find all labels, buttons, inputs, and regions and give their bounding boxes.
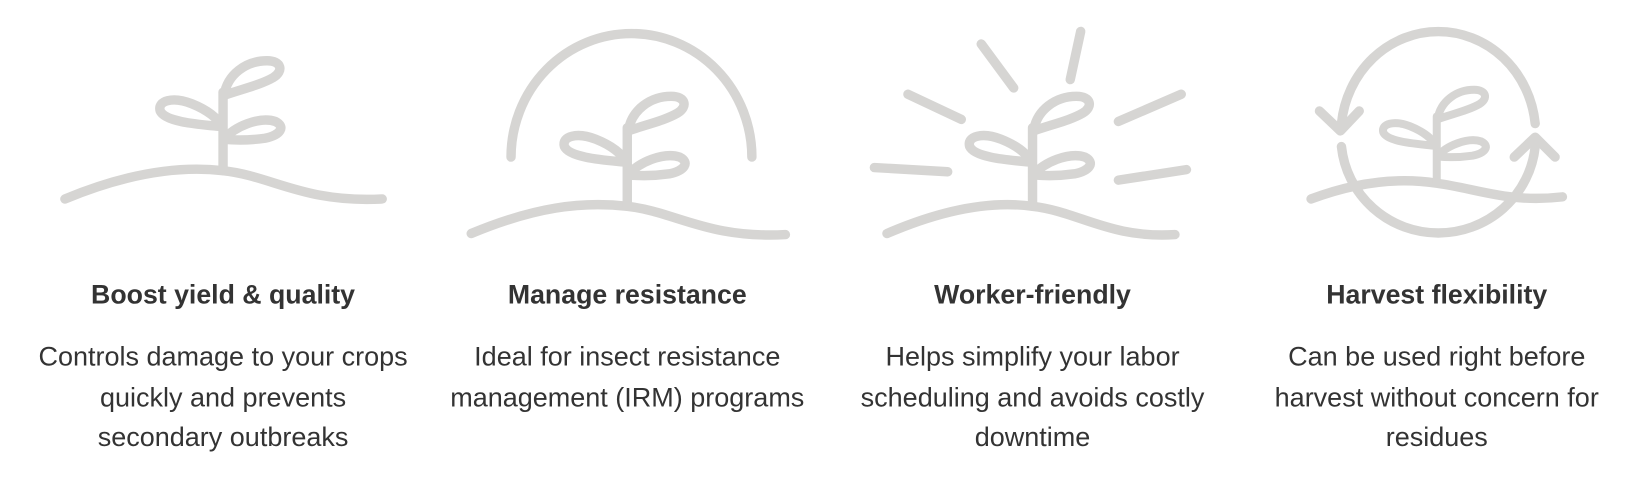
icon: plant on hill <box>65 61 382 199</box>
heading: worker-friendly: Worker-friendly <box>934 280 1131 310</box>
text: boost yield description: secondary outbreaks <box>98 422 348 452</box>
text: worker-friendly description: Helps simplify your labor <box>885 341 1180 371</box>
text: worker-friendly description: downtime <box>975 422 1090 452</box>
icon: plant under arc <box>471 34 785 235</box>
text: boost yield description: Controls damage to your crops <box>38 341 408 371</box>
text: manage resistance description: management (IRM) programs <box>450 382 804 412</box>
text: harvest flexibility description: harvest without concern for <box>1275 382 1599 412</box>
panel: harvest flexibility <box>1275 32 1599 452</box>
text: harvest flexibility description: residues <box>1386 422 1488 452</box>
heading: manage resistance: Manage resistance <box>508 280 747 310</box>
panel: worker-friendly <box>861 31 1205 452</box>
text: worker-friendly description: scheduling and avoids costly <box>861 382 1205 412</box>
heading: harvest flexibility: Harvest flexibility <box>1326 280 1547 310</box>
text: boost yield description: quickly and prevents <box>100 382 346 412</box>
text: manage resistance description: Ideal for insect resistance <box>474 341 780 371</box>
icon: plant with sun rays <box>874 31 1186 235</box>
icon: plant in cycle arrows <box>1311 32 1562 233</box>
panel: boost yield <box>38 61 408 452</box>
heading: boost yield: Boost yield & quality <box>91 280 355 310</box>
text: harvest flexibility description: Can be used right before <box>1288 341 1585 371</box>
panel: manage resistance <box>450 34 804 412</box>
